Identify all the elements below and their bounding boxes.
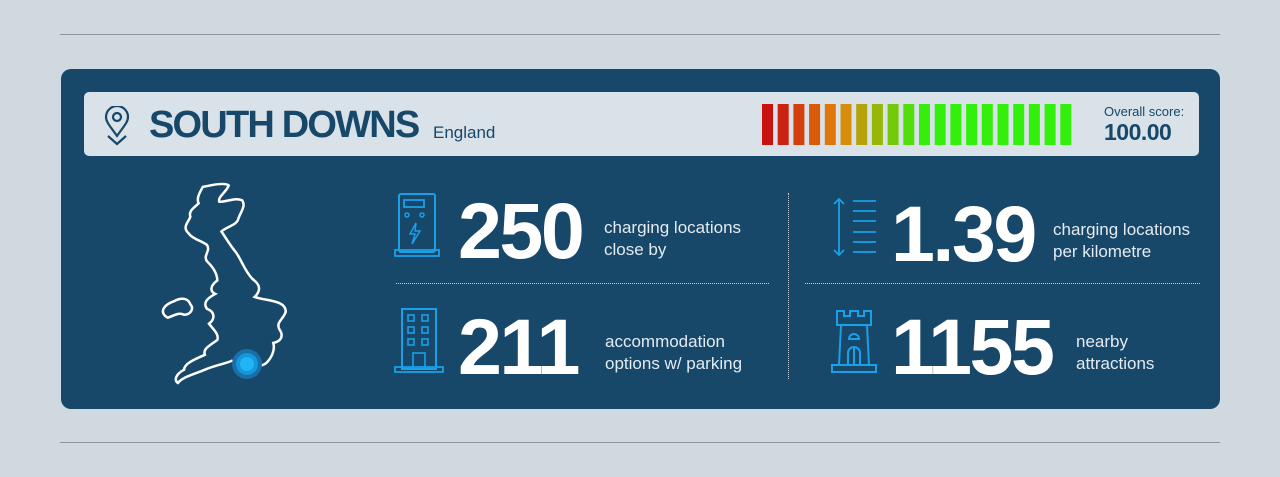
stat: accommodation: 211 xyxy=(458,302,578,391)
stat: per kilometre: 1.39 xyxy=(891,189,1035,278)
title: SOUTH DOWNS xyxy=(149,104,418,146)
stat: attractions: 1155 xyxy=(891,302,1052,391)
icon: vertical arrow with lines xyxy=(833,198,876,256)
stat: charging locations: charging locations xyxy=(604,218,741,237)
stat: per kilometre: per kilometre xyxy=(1053,242,1151,261)
stat: per kilometre: charging locations xyxy=(1053,220,1190,239)
subtitle: England xyxy=(433,123,495,142)
stat: charging locations: close by xyxy=(604,240,666,259)
icon: location pin xyxy=(104,106,130,146)
icon: location dot xyxy=(232,349,262,379)
map: UK outline xyxy=(162,182,287,384)
score bar xyxy=(762,104,1072,145)
header bar xyxy=(84,92,1199,156)
overall score: Overall score: xyxy=(1104,104,1184,119)
overall score: 100.00 xyxy=(1104,119,1171,145)
stat: charging locations xyxy=(394,186,741,275)
stat: accommodation: options w/ parking xyxy=(605,354,742,373)
stat: attractions xyxy=(831,302,1154,391)
stat: accommodation: accommodation xyxy=(605,332,725,351)
icon: castle tower xyxy=(831,310,877,373)
stat: accommodation xyxy=(394,302,742,391)
panel: main card xyxy=(61,69,1220,409)
icon: charger xyxy=(394,193,440,257)
stat: attractions: attractions xyxy=(1076,354,1154,373)
stat: attractions: nearby xyxy=(1076,332,1128,351)
overall score xyxy=(1104,104,1184,145)
dividers xyxy=(396,283,769,284)
stat: per kilometre xyxy=(833,189,1190,278)
icon: building xyxy=(394,308,444,373)
stat: charging locations: 250 xyxy=(458,186,582,275)
